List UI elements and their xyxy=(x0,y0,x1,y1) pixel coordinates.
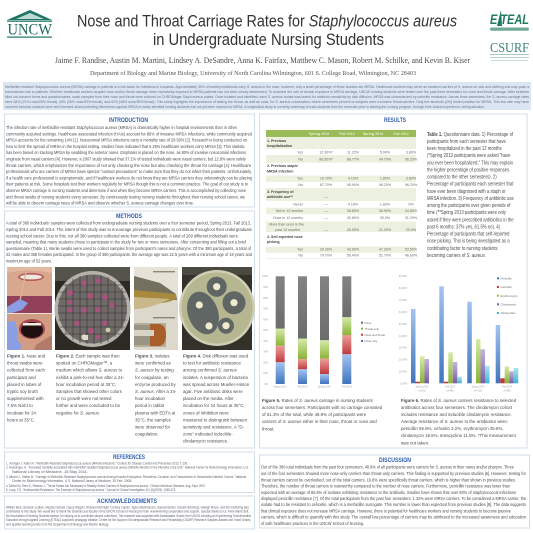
chart: antibiotic resistance bars: 90.00% xyxy=(399,275,408,278)
caption: figure 3: were observed for xyxy=(135,424,170,430)
legend: carriage: Throat only xyxy=(364,327,380,331)
legend: carriage: None xyxy=(364,321,372,325)
chart: antibiotic resistance bars: 70.00% xyxy=(399,299,408,302)
text: introduction body xyxy=(6,125,252,206)
chart: antibiotic resistance bars: 50.00% xyxy=(399,323,408,326)
chart: carriage rates stacked bars: 20% xyxy=(263,361,269,364)
table: questionnaire data: 3.80% xyxy=(406,150,417,154)
caption: figure 6: Average resistance of S. aureus to the antibiotics were: xyxy=(401,419,508,424)
photo: disk diffusion plate xyxy=(179,267,255,350)
text: methods body: sampled, meaning that many students chose to participate in the study for two or more semesters. After consenting and filling out a brief xyxy=(6,240,247,245)
heading: acknowledgements: ACKNOWLEDGEMENTS xyxy=(97,499,157,505)
table: questionnaire data: 44.80% xyxy=(405,209,418,213)
caption: figure 1: tryptic soy broth xyxy=(7,389,38,394)
table: questionnaire data: hospitalization xyxy=(267,144,292,148)
caption: figure 1: hours at 35°C. xyxy=(7,417,35,422)
table: questionnaire data: Once in 12 months xyxy=(273,216,303,220)
chart: antibiotic resistance bars: 30.00% xyxy=(399,346,408,350)
chart: antibiotic resistance bars: 10.00% xyxy=(399,370,408,374)
text: reference list: 4. Dietzel M, Renz E, Reidens J. "Throat Swabs Are Necessary to Reliably Detect Carriers of Staphylococcus aureus." Clinical Infectious Diseases, Aug.-Sept. 2007. xyxy=(6,483,206,488)
legend: carriage: Nose and throat xyxy=(364,333,385,337)
text: methods body: Spring 2014 and Fall 2014. The intent of this study was to encourage previous participants to contribute throughout their undergraduate xyxy=(6,227,252,232)
caption: table 1: been hospitalized in the past 12 months xyxy=(427,146,502,151)
legend: carriage xyxy=(361,321,385,343)
text: reference list xyxy=(6,460,249,492)
caption: table 1: you ever been hospitalized." This may explain xyxy=(427,160,513,165)
text: acknowledgements body xyxy=(6,504,251,526)
text: discussion body: of safe healthcare practices in the UNCW School of Nursing. xyxy=(261,521,364,526)
chart: antibiotic resistance bars xyxy=(399,275,518,392)
caption: table 1: participants from each semester that have xyxy=(427,139,506,144)
table: questionnaire data: 1.80% xyxy=(380,202,391,206)
caption: table 1: becoming carriers of S. aureus. xyxy=(427,253,486,258)
logo: UNCW xyxy=(7,10,52,38)
legend: antibiotics xyxy=(497,276,518,315)
caption: figure 3: S. aureus by testing xyxy=(135,367,174,373)
caption: figure 1: participant and xyxy=(7,375,36,380)
text: introduction body: and throat swabs of nursing students every semester. By continuously testing nursing students throughout their nursing school career, we xyxy=(6,194,245,199)
chart: carriage rates stacked bars: 40% xyxy=(263,340,269,343)
table: questionnaire data: 94.70% xyxy=(379,158,392,162)
photo: nose and throat swabbing xyxy=(7,267,52,350)
table: questionnaire data: 20.0% xyxy=(406,228,417,232)
authors: Jaime F. Randise, Austin M. Martini, Lindsey A. DeSandre, Anna K. Fairfax, Matthew C. Mason, Robert M. Schilke, and Kevin B. Kiser xyxy=(55,56,470,65)
chart: carriage rates stacked bars: 80% xyxy=(263,297,269,300)
table: questionnaire data: 52.70% xyxy=(379,254,392,258)
table: questionnaire data: 98.20% xyxy=(379,183,392,187)
caption: figure 4: was spread across Mueller-Hinton xyxy=(183,382,250,387)
title: Nose and Throat Carriage Rates for Staphylococcus aureus xyxy=(77,12,457,30)
caption: figure 3: enzyme produced by xyxy=(135,382,176,387)
caption: figure 3: S. aureus. After a 24- xyxy=(135,389,177,394)
text: acknowledgements body: Education through Applied Learning (ETEAL) supported pedagogy initiative, Center for the Support of Undergraduate Research and Fellowships (CSURF) Research Supplies Awards and Travel Grants, xyxy=(6,517,251,522)
caption: figure 1: collected from each xyxy=(7,367,45,373)
text: reference list: 2. Hassanger, H. "Increased mortality associated with methicillin-resistant Staphylococcus aureus (MRSA) infection in the Intensive Care Unit." National Center for Biotechnology Information, U.S. xyxy=(6,465,249,470)
table: questionnaire data: past 12 months xyxy=(275,228,300,232)
panel: acknowledgements xyxy=(4,496,254,529)
table: questionnaire data: — xyxy=(324,209,328,213)
chart: carriage rates stacked bars: 10% xyxy=(263,372,269,375)
caption: figure 3: 35°C, the samples xyxy=(135,417,171,422)
chart: antibiotic resistance bars: 40.00% xyxy=(399,335,408,338)
legend: antibiotics: Erythromycin xyxy=(500,294,518,298)
caption: figure 2: Samples that showed other colors xyxy=(56,389,123,394)
caption: figure 4: to test for antibiotic resistance xyxy=(183,360,241,366)
caption: figure 5: of 51.3% of the total, while 48.9% of participants were xyxy=(262,412,367,417)
text: introduction body: community acquired settings. Healthcare associated infection (HAIs) account for 86% of invasive MRSA infections, while community acquired xyxy=(6,131,252,136)
caption: figure 5 xyxy=(262,398,383,431)
affiliation: Department of Biology and Marine Biology, University of North Carolina Wilmington, 601 S. College Road, Wilmington, NC 28403 xyxy=(90,70,416,77)
table: questionnaire data: Yes xyxy=(297,150,303,154)
table: questionnaire data: Spring 2013 xyxy=(309,132,329,136)
caption: figure 4 xyxy=(183,353,250,444)
caption: figure 6: includes resistance and inducible clindamycin resistance. xyxy=(401,412,512,417)
legend: antibiotics: Cefoxitin xyxy=(500,285,512,289)
chart: carriage rates stacked bars: 50% xyxy=(263,329,269,332)
chart: antibiotic resistance bars: (n=113) xyxy=(474,390,482,392)
table: questionnaire data: 56.40% xyxy=(347,254,360,258)
caption: figure 6 xyxy=(401,398,517,445)
title: in Undergraduate Nursing Students xyxy=(153,31,384,49)
caption: figure 1: supplemented with xyxy=(7,396,44,401)
table: questionnaire data: 43.60% xyxy=(347,248,360,252)
caption: table 1: contributing factor to nursing students xyxy=(427,246,498,251)
table: questionnaire data: — xyxy=(324,202,328,206)
chart: carriage rates stacked bars xyxy=(262,275,385,388)
caption: figure 2: spotted on CHROMagar™, a xyxy=(56,360,113,366)
caption: figure 2 xyxy=(56,353,125,415)
photo: coagulase tubes xyxy=(134,267,178,350)
caption: figure 5: carriers of S. aureus either in their nose, throat or nose and xyxy=(262,419,377,424)
caption: figure 4: isolates. A suspension of bacteria xyxy=(183,375,248,380)
table: questionnaire data: 2. Previous staph/ xyxy=(267,164,298,168)
caption: figure 3: Figure 3. Isolates xyxy=(135,353,170,359)
table: questionnaire data: — xyxy=(324,195,328,199)
legend: antibiotics: Penicillin xyxy=(500,276,512,280)
table: questionnaire data: antibiotic use** xyxy=(267,195,294,199)
caption: table 1: (*Spring 2013 participants were asked "have xyxy=(427,153,511,158)
table: questionnaire data: Yes xyxy=(297,176,303,180)
chart: antibiotic resistance bars: 80.00% xyxy=(399,287,408,290)
caption: figure 5: Figure 5. Rates of S. aureus carriage in nursing students xyxy=(262,398,373,403)
table: questionnaire data: 3. Frequency of xyxy=(267,190,294,194)
table: questionnaire data: No xyxy=(298,158,303,162)
text: introduction body: originate from nasal carriers [4]. However, a 2007 study showed that 37.1% of tested individuals were nasal carriers, but 12.8% were solely xyxy=(6,156,247,162)
caption: table 1: Percentage of participants each semester that xyxy=(427,181,514,187)
caption: figure 3: hour incubation xyxy=(135,396,165,401)
text: methods body: A total of 380 individuals' samples were collected from undergraduate nursing students over a four semester period, Spring 2013, Fall 2013, xyxy=(6,220,251,226)
text: discussion body xyxy=(261,465,527,526)
caption: figure 6: clindamycin 19.5%, tetracycline 11.5%. *This measurement xyxy=(401,433,516,438)
logo: CSURF: CSURF xyxy=(490,40,529,55)
logo: UNCW: UNCW xyxy=(8,22,52,38)
table: questionnaire data: Spring 2014 xyxy=(363,132,383,136)
chart: antibiotic resistance bars: 60.00% xyxy=(399,311,408,314)
panel: discussion xyxy=(260,455,530,528)
caption: figure 6: penicillin 65.6%, cefoxitin 2.2%, erythromycin 25.6%, xyxy=(401,426,503,431)
heading: introduction: INTRODUCTION xyxy=(109,118,148,124)
chart: carriage rates stacked bars: 70% xyxy=(263,308,269,310)
table: questionnaire data: 0% xyxy=(408,202,414,206)
chart: antibiotic resistance bars: Fall 2013 xyxy=(445,386,456,388)
text: reference list: 1. Jernigan J, Kallen A. "Methicillin-Resistant Staphylococcus aureus (MRSA) Infections." Centers for Disease Control and Prevention 2013: 1-130. xyxy=(6,460,188,465)
caption: table 1: have ever been diagnosed with a staph or xyxy=(427,188,506,194)
caption: table 1: time (**Spring 2013 participants were only xyxy=(427,210,507,215)
chart: antibiotic resistance bars: (n=98) xyxy=(447,390,454,392)
caption: table 1: past 6 months: 37% yes, 61.5% no). 4) xyxy=(427,224,500,230)
caption: figure 2: negative for S. aureus. xyxy=(56,410,100,415)
chart: antibiotic resistance bars: Fall 2014 xyxy=(502,386,513,388)
chart: antibiotic resistance bars: (n=81) xyxy=(419,390,426,392)
table: questionnaire data: 31.20% xyxy=(405,216,418,220)
caption: figure 3: coagulation. xyxy=(135,431,159,437)
text: introduction body: throat carriers, which emphasizes the importance of not only checking the nose but also checking the throat for carriage [4]. Healthcare xyxy=(6,163,251,168)
caption: figure 6: Figure 6. Rates of S. aureus carriers resistance to selected xyxy=(401,398,517,403)
chart: carriage rates stacked bars: Fall 2014 xyxy=(342,386,353,388)
text: reference list: 3. Albrich C, Stefan M. "Carriage of Methicillin-Resistant Staphylococcus aureus Among Hospital Employees: Prevalence, Duration, and Transmission to Households Infection Control." National xyxy=(6,474,246,479)
table: questionnaire data: 88.77% xyxy=(347,158,360,162)
chart: antibiotic resistance bars: 20.00% xyxy=(399,358,408,362)
caption: figure 4: zone" indicated inducible- xyxy=(183,431,233,437)
caption: figure 6: antibiotics across four semesters. The clindamycin cohort xyxy=(401,405,513,410)
text: reference list: 5. Lowy, F.D. "Antimicrobial Resistance: The Example of Staphylococcus aureus." Journal of Clinical Investigation 111 (5)(2003): 1265-373. xyxy=(6,487,176,492)
caption: figure 2: hour incubation period at 35°C. xyxy=(56,382,116,387)
caption: figure 2: medium which allows S. aureus to xyxy=(56,367,123,373)
chart: carriage rates stacked bars: Spring 2014 xyxy=(318,386,332,388)
table: questionnaire data: 96.20% xyxy=(405,158,418,162)
text: introduction body: has been based on tracking MRSA by swabbing the anterior nares. Emphasis is placed on the nose, as 80% of invasive nosocomial infections xyxy=(6,150,247,155)
table: questionnaire data: 1. Previous xyxy=(267,139,286,143)
table: questionnaire data: 79.70% xyxy=(320,254,333,258)
caption: figure 3: were confirmed as xyxy=(135,360,171,366)
caption: figure 4: agar. Five antibiotic disks were xyxy=(183,389,243,394)
text: reference list: Center for Biotechnology Information, U.S. National Library of Medicine, 20 Feb. 2008. xyxy=(12,478,132,483)
table: questionnaire data: 46.60% xyxy=(405,254,418,258)
chart: antibiotic resistance bars: 0.00% xyxy=(400,382,408,386)
caption: figure 1 xyxy=(7,353,46,422)
table: questionnaire data: 47.30% xyxy=(379,248,392,252)
table: questionnaire data: 87.70% xyxy=(320,183,333,187)
caption: table 1: Table 1. Questionnaire data. 1) Percentage of xyxy=(427,131,514,137)
text: acknowledgements body: contributed to this study. We would like to thank the students and faculty of the UNCW School of Nursing for their overwhelming cooperation and support. Special thanks to Dr. Anne Marie Self, xyxy=(6,509,249,514)
text: introduction body: MRSA accounts for the remaining 14% [1]. Nosocomial MRSA infections carry a mortality rate of 20-50% [2]. Research is being conducted on xyxy=(6,138,247,143)
chart: carriage rates stacked bars: Spring 2013 xyxy=(274,386,287,388)
logo: CSURF xyxy=(490,40,529,61)
text: introduction body: how to limit the spread of MRSA in the hospital setting. Studies have indicated that 5.25% healthcare workers carry MRSA [3]. This statistic xyxy=(6,144,246,149)
table: questionnaire data: 5.90% xyxy=(380,150,391,154)
caption: figure 2: further and were concluded to be xyxy=(56,403,120,408)
caption: figure 4: zones of inhibition were xyxy=(183,410,229,415)
caption: figure 4: sensitivity and resistance. A "D- xyxy=(183,424,244,430)
table: questionnaire data: More than once in the xyxy=(269,222,304,226)
table: questionnaire data: 20.30% xyxy=(320,248,333,252)
text: introduction body: their patients at risk. Some hospitals test their workers regularly for MRSA though this is not a common practice. The goal of our study is to xyxy=(6,182,248,187)
panel: results xyxy=(260,114,527,448)
chart: antibiotic resistance bars: (n=88) xyxy=(504,390,511,392)
table: questionnaire data: No xyxy=(298,183,303,187)
table: questionnaire data: 4.10% xyxy=(348,176,359,180)
legend: antibiotics: Clindamycin xyxy=(500,302,517,306)
caption: figure 1: throat swabs were xyxy=(7,360,43,366)
text: acknowledgements body: and applied learning funds from the Department of Biology and Marine Biology. xyxy=(6,522,109,526)
chart: carriage rates stacked bars: Fall 2013 xyxy=(298,386,308,388)
table: questionnaire data: Never xyxy=(293,202,304,206)
table: questionnaire data: Yes xyxy=(297,248,303,252)
text: acknowledgements body: the Association of Nursing Students advisor, for helping us to coordinate sample collections. This research was supported with Ambassador Grants from UNCW including an Experiencing Transformative xyxy=(6,513,251,518)
caption: figure 4: measured to distinguish between xyxy=(183,417,247,422)
caption: figure 4: incubation for 24 hours at 35°C, xyxy=(183,403,245,408)
table: questionnaire data: 95.90% xyxy=(347,183,360,187)
heading: discussion: DISCUSSION xyxy=(379,458,411,464)
table: questionnaire data: 30.0% xyxy=(380,216,391,220)
table: questionnaire data: No xyxy=(298,254,303,258)
table: questionnaire data: — xyxy=(324,228,328,232)
table: questionnaire data: 10.70% xyxy=(320,176,333,180)
table: questionnaire data: picking xyxy=(267,240,280,244)
table: questionnaire data: 26.50% xyxy=(347,228,360,232)
caption: figure 3: period in rabbit xyxy=(135,403,165,408)
chart: carriage rates stacked bars: 30% xyxy=(263,351,269,354)
caption: figure 5: across four semesters. Participants with no carriage consisted xyxy=(262,405,383,410)
table: questionnaire data: 21.20% xyxy=(379,228,392,232)
caption: figure 2: Figure 2. Each sample was then xyxy=(56,353,120,359)
abstract xyxy=(3,82,531,110)
table: questionnaire data: 1.80% xyxy=(380,176,391,180)
caption: figure 2: or no growth were not tested xyxy=(56,396,112,401)
text: introduction body: professionals who are carriers of MRSA have special "contact precautions" to make sure that they do not infect their patients. Unfortunately, xyxy=(6,169,252,174)
caption: figure 6: was not taken. xyxy=(401,440,429,445)
table: questionnaire data: 30.60% xyxy=(347,216,360,220)
heading: results: RESULTS xyxy=(384,118,406,124)
chart: antibiotic resistance bars: Spring 2014 xyxy=(472,386,485,388)
caption: table 1: nose picking. This is being investigated as a xyxy=(427,238,510,244)
text: introduction body: will be able to discern carriage rates of MRSA and observe whether S. aureus carriage changes over time. xyxy=(6,201,194,206)
caption: figure 3: plasma with EDTA at xyxy=(135,410,176,415)
caption: figure 1: 7.5% NaCl to xyxy=(7,403,33,408)
table: questionnaire data: 12.30%* xyxy=(319,150,333,154)
panel: introduction xyxy=(4,114,254,207)
chart: carriage rates stacked bars: 60% xyxy=(263,318,269,321)
caption: figure 1: placed in tubes of xyxy=(7,382,42,387)
photo: CHROMagar plate xyxy=(54,267,130,350)
heading: references: REFERENCES xyxy=(113,455,145,461)
chart: carriage rates stacked bars: 100% xyxy=(262,275,269,278)
panel: references xyxy=(4,452,254,492)
title xyxy=(77,12,457,49)
table: questionnaire data: 53.50% xyxy=(405,248,418,252)
text: acknowledgements body: William Beck, Brandon Ludlum, Meghan Sebold, Caecy Wagner, Rhianna McKnight, Cortney Caplan, Taylor Mastrobuono, Samuel Barton, Garrett Hutchings, Haleigh Moore, and Erin DeNoring also xyxy=(6,504,249,509)
caption: figure 4: clindamycin resistance. xyxy=(183,438,228,444)
table: questionnaire data: 28.80% xyxy=(347,209,360,213)
chart: carriage rates stacked bars: 0% xyxy=(265,383,269,386)
text: methods body: maximum age of 52 years. xyxy=(6,258,52,264)
table: questionnaire data: 96.20% xyxy=(405,183,418,187)
caption: table 1: Percentage of participants that self-reported xyxy=(427,231,510,237)
text: methods body xyxy=(6,220,252,264)
caption: figure 5: throat. xyxy=(262,426,274,431)
legend: antibiotics: Tetracycline xyxy=(500,311,516,315)
caption: figure 1: incubate for 24 xyxy=(7,410,36,415)
table: questionnaire data: Not in 12 months xyxy=(276,209,303,213)
text: introduction body: if a health care professional is asymptomatic, and if healthcare workers do not know they are MRSA carriers they unknowingly can be placing xyxy=(6,175,252,180)
caption: table 1: asked if they were prescribed antibiotics in the xyxy=(427,217,514,222)
table: questionnaire data: MRSA infection xyxy=(267,169,293,173)
caption: figure 4: placed on the media. After xyxy=(183,396,234,401)
caption: table 1: among the participants over given periods of xyxy=(427,203,511,208)
logo: ETEAL xyxy=(490,10,529,31)
caption: figure 3: for coagulase, an xyxy=(135,375,169,380)
caption: figure 3 xyxy=(135,353,177,437)
legend: carriage: Nose only xyxy=(364,339,378,343)
table: questionnaire data: 46.90% xyxy=(379,209,392,213)
table: questionnaire data: Fall 2013 xyxy=(339,132,355,136)
caption: figure 1: Figure 1. Nose and xyxy=(7,353,46,359)
caption: table 1: compared to the other semesters). 2) xyxy=(427,174,497,180)
text: reference list: National Library of Medicine, 15 May 2011. xyxy=(12,469,88,474)
chart: carriage rates stacked bars: 90% xyxy=(263,286,269,289)
text: methods body: 22 males and 358 females participated. In the group of 380 participants, the average age was 22.5 years with a minimum age of 18 years and xyxy=(6,252,252,257)
table: questionnaire data: Fall 2014 xyxy=(393,132,409,136)
panel: methods xyxy=(4,211,255,448)
text: introduction body: observe MRSA carriage in nursing students and determine if and when they become MRSA carriers. This is accomplished by collecting nose xyxy=(6,188,246,193)
caption: table 1: the higher percentage of positive responses xyxy=(427,167,510,172)
caption: table 1 xyxy=(427,131,514,258)
table: questionnaire data: 3.80% xyxy=(406,176,417,180)
table: questionnaire data: 86.50%* xyxy=(319,158,333,162)
caption: figure 4: Figure 4. Disk diffusion was used xyxy=(183,353,249,359)
chart: antibiotic resistance bars: Spring 2013 xyxy=(416,386,429,388)
table: questionnaire data: — xyxy=(324,216,328,220)
heading: methods: METHODS xyxy=(116,214,142,220)
table: questionnaire data: 4.10% xyxy=(348,202,359,206)
table: questionnaire data: 4. Self-reported nose xyxy=(267,235,303,239)
text: methods body: nursing school career. Due to this, not all 380 samples collected were from different people. A total of 269 different individuals were xyxy=(6,233,238,238)
caption: figure 4: among confirmed S. aureus xyxy=(183,367,237,373)
text: methods body: questionnaire (Table 1), sterile swabs were used to collect samples from participant's nares and pharynx. Of the 380 participants, a total of xyxy=(6,246,252,251)
caption: table 1: MRSA infection. 3) Frequency of antibiotic use xyxy=(427,196,514,201)
table: questionnaire data xyxy=(266,130,418,258)
caption: figure 2: exhibit a pink-to-red hue after a 24- xyxy=(56,375,125,380)
table: questionnaire data: 11.22% xyxy=(347,150,360,154)
text: introduction body: The infection rate of methicillin-resistant Staphylococcus aureus (MRSA) is dramatically higher in hospital environments than in other xyxy=(6,125,237,130)
